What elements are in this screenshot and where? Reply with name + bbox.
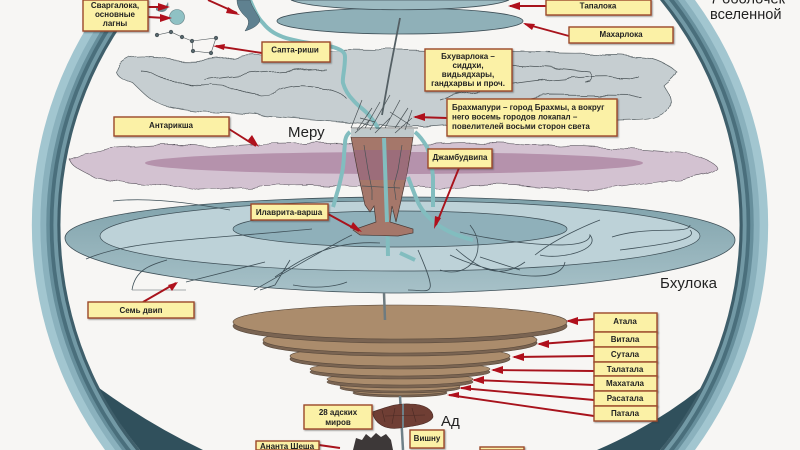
label: patala	[594, 406, 657, 421]
Tapa-loka disc	[291, 0, 509, 10]
Mahar-loka disc	[277, 8, 523, 34]
label: mahatala	[594, 376, 657, 391]
label: jambudvipa: Джамбудвипа	[432, 153, 488, 162]
label: tapaloka	[546, 0, 651, 15]
label: bhuvarloka: сиддхи,	[452, 61, 484, 70]
antariksha purple layer	[69, 143, 717, 190]
label: vishnu	[410, 430, 444, 448]
label: talatala: Талатала	[607, 365, 644, 374]
cloud layer	[116, 50, 677, 126]
label: antariksha: Антарикша	[149, 121, 194, 130]
heading shells: вселенной	[710, 7, 782, 23]
swargaloka sun icon	[170, 10, 184, 24]
label: patala: Патала	[611, 409, 640, 418]
mount meru	[351, 18, 418, 236]
arrows	[143, 0, 594, 448]
label: 28 hells	[304, 405, 372, 429]
heading shells	[710, 0, 786, 23]
label: vitala: Витала	[611, 335, 640, 344]
label: brahmapuri: Брахмапури – город Брахмы, а вокруг	[452, 103, 605, 112]
label: maharloka	[569, 27, 673, 43]
label: ilavrita: Илаврита-варша	[256, 208, 323, 217]
label: atala: Атала	[613, 317, 637, 326]
label: rasatala	[594, 391, 657, 406]
fish icon	[237, 0, 260, 31]
label: sapta rishi	[262, 42, 330, 62]
label ad: Ад	[441, 413, 460, 430]
label: bottom right	[480, 447, 524, 450]
label: svargaloka: основные	[95, 10, 136, 19]
bhuloka disc	[65, 197, 735, 293]
label: svargaloka	[83, 0, 148, 31]
label: 28 hells: 28 адских	[319, 408, 358, 417]
world axis lower	[400, 396, 403, 450]
label: antariksha	[114, 117, 229, 136]
label: bhuvarloka: Бхуварлока –	[441, 52, 495, 61]
serpent ananta shesha	[353, 433, 393, 450]
label: mahatala: Махатала	[606, 379, 645, 388]
river ganges	[250, 0, 473, 260]
label: sutala: Сутала	[611, 350, 640, 359]
hell lump	[372, 404, 433, 428]
label: atala	[594, 313, 657, 332]
label: brahmapuri	[447, 99, 617, 136]
label: talatala	[594, 362, 657, 376]
world axis upper	[384, 293, 385, 320]
label meru: Меру	[288, 124, 325, 141]
label: svargaloka: лагны	[103, 19, 127, 28]
label: jambudvipa	[428, 149, 492, 168]
label: sem dvip	[88, 302, 194, 318]
label: maharloka: Махарлока	[599, 30, 643, 39]
label: 28 hells: миров	[325, 418, 351, 427]
label: brahmapuri: него восемь городов локапал –	[452, 112, 578, 122]
label: rasatala: Расатала	[607, 394, 644, 403]
label: svargaloka: Сваргалока,	[91, 1, 139, 10]
label: vitala	[594, 332, 657, 347]
label: brahmapuri: повелителей восьми сторон света	[452, 122, 590, 131]
bottom dark shell	[99, 388, 701, 450]
constellation sapta rishi	[155, 30, 218, 55]
label: sapta rishi: Сапта-риши	[271, 46, 319, 54]
label: bhuvarloka	[425, 49, 512, 91]
swargaloka moon icon	[156, 2, 168, 12]
label: sutala	[594, 347, 657, 362]
label: tapaloka: Тапалока	[580, 2, 617, 10]
label: vishnu: Вишну	[414, 434, 441, 443]
label bhuloka: Бхулока	[660, 275, 718, 292]
label: bhuvarloka: видьядхары,	[442, 70, 494, 79]
label: bhuvarloka: гандхарвы и проч.	[431, 79, 505, 88]
hell discs	[233, 305, 567, 397]
label: sem dvip: Семь двип	[120, 306, 163, 315]
label: ilavrita	[251, 204, 328, 220]
